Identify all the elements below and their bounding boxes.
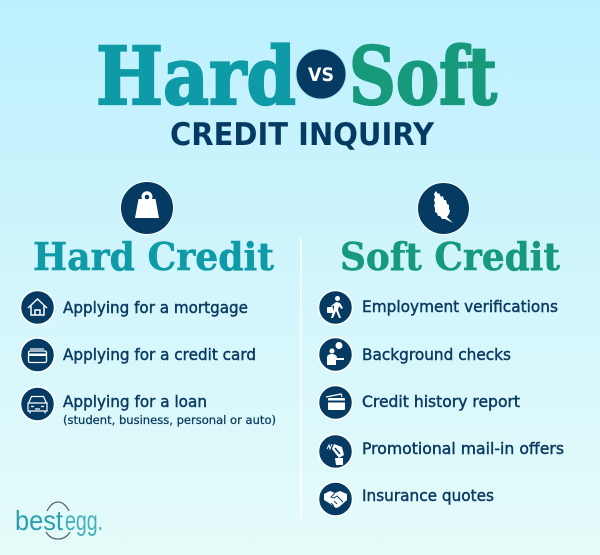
vs badge: VS [308, 64, 334, 86]
item: mortgage: Applying for a mortgage [63, 298, 248, 317]
item: insurance: Insurance quotes [362, 486, 494, 505]
item: credit card: Applying for a credit card [63, 345, 256, 364]
icon: weight [120, 182, 174, 234]
item: loan [20, 387, 276, 427]
item: promotional mail: Promotional mail-in offers [362, 439, 564, 458]
logo: best egg: best [15, 505, 63, 536]
heading: hard credit: Hard Credit [33, 234, 274, 279]
item: credit history: Credit history report [362, 392, 520, 411]
item: insurance [318, 482, 494, 516]
panel: soft credit [318, 182, 564, 516]
title [96, 29, 497, 153]
item: credit card [20, 338, 256, 372]
divider [300, 238, 302, 519]
item: background checks: Background checks [362, 345, 511, 364]
item: employment: Employment verifications [362, 297, 558, 316]
icon: feather [418, 182, 470, 234]
heading: soft credit: Soft Credit [340, 234, 560, 279]
item: loan: Applying for a loan [63, 392, 207, 411]
item: loan: (student, business, personal or auto) [63, 413, 276, 427]
logo: best egg: egg. [65, 505, 103, 536]
title word: Hard: Hard [96, 29, 296, 123]
item: credit history [318, 386, 520, 420]
item: employment [318, 290, 558, 324]
panel: hard credit [20, 182, 276, 427]
vs badge [296, 49, 346, 99]
item: promotional mail [318, 434, 564, 468]
item: mortgage [20, 290, 248, 324]
title word: Soft: Soft [349, 29, 497, 123]
subtitle: CREDIT INQUIRY [170, 117, 435, 153]
logo: best egg [15, 502, 103, 539]
item: background checks [318, 338, 511, 372]
